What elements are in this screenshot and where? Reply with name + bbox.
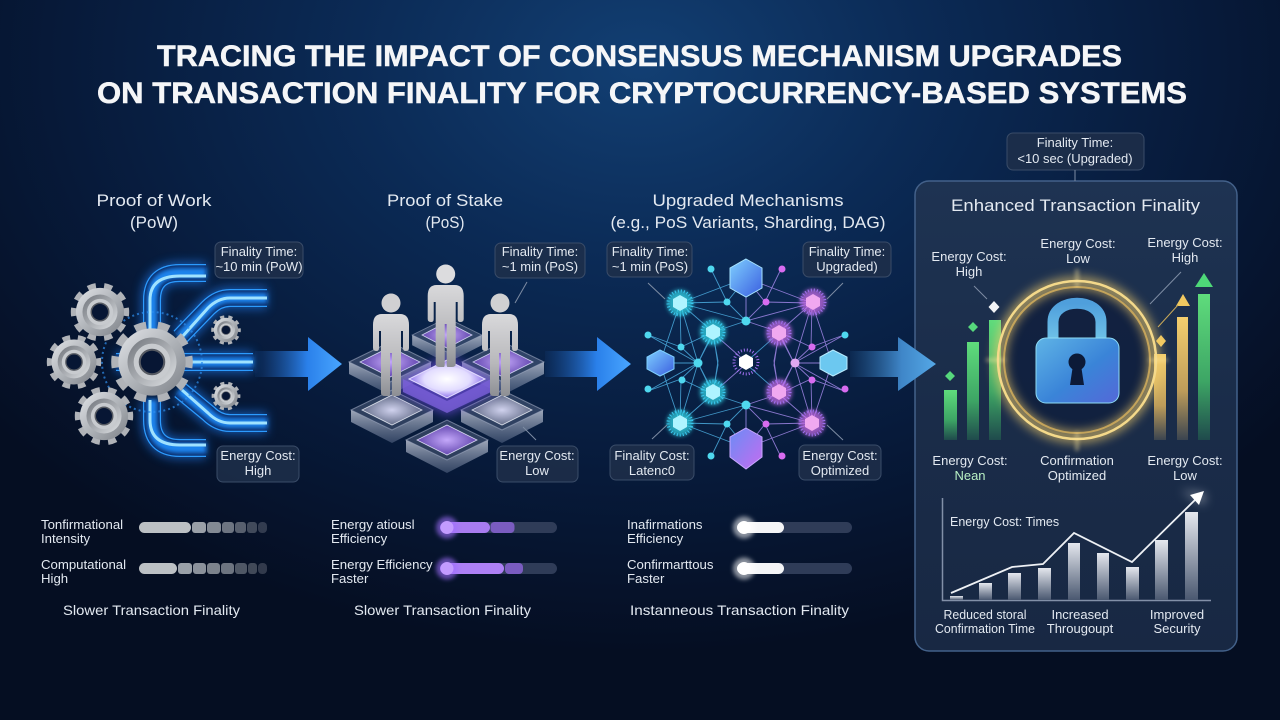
callout: finality time pos: ~1 min (PoS) <box>502 259 578 274</box>
arrow: upgraded to enhanced <box>850 337 936 391</box>
heading: upgraded mechanisms: (e.g., PoS Variants, Sharding, DAG) <box>610 213 886 232</box>
labels: energy costs upper: Energy Cost: <box>1147 235 1223 250</box>
heading: proof of stake <box>387 191 503 232</box>
heading: proof of stake: Proof of Stake <box>387 191 503 210</box>
progress: energy efficiency: Efficiency <box>331 531 388 546</box>
heading: proof of stake: (PoS) <box>426 213 464 232</box>
progress: energy efficiency faster <box>331 557 557 586</box>
labels: outcomes: Reduced storal <box>944 607 1027 622</box>
callout: finality time upgraded: Upgraded) <box>816 259 878 274</box>
callout: top finality time: Finality Time: <box>1037 135 1113 150</box>
heading: proof of work: Proof of Work <box>96 191 212 210</box>
callout: finality cost latency <box>610 445 694 480</box>
icon: glowing pipes <box>116 273 267 448</box>
labels: energy costs upper: High <box>1172 250 1198 265</box>
heading: upgraded mechanisms <box>610 191 886 232</box>
arrow: pos to upgraded <box>545 337 631 391</box>
decorative energy circle <box>102 312 202 412</box>
labels: energy costs lower: Optimized <box>1048 468 1106 483</box>
labels: energy costs lower: Confirmation <box>1040 453 1114 468</box>
callout: finality time pow <box>215 242 303 278</box>
labels: energy costs lower: Energy Cost: <box>1147 453 1223 468</box>
panel background <box>915 181 1237 651</box>
callout: finality time pos: Finality Time: <box>612 244 688 259</box>
callout: energy cost high <box>217 446 299 482</box>
heading: upgraded mechanisms: Upgraded Mechanisms <box>652 191 844 210</box>
progress: confirmations faster <box>627 557 852 586</box>
labels: energy costs lower <box>932 453 1223 483</box>
callout: finality time pos: ~1 min (PoS) <box>612 259 688 274</box>
panel: proof of work <box>41 191 303 618</box>
callout: energy cost optimized <box>799 445 881 480</box>
callout: energy cost high: Energy Cost: <box>220 448 296 463</box>
icon: lock with gold ring <box>986 269 1168 451</box>
diagram: network <box>644 259 848 469</box>
labels: energy costs lower: Energy Cost: <box>932 453 1008 468</box>
progress: confirmational intensity: Tonfirmational <box>41 517 123 532</box>
callout: energy cost optimized: Optimized <box>811 463 869 478</box>
progress: confirmations faster: Confirmarttous <box>627 557 714 572</box>
labels: outcomes: Increased <box>1051 607 1109 622</box>
heading: enhanced finality: Enhanced Transaction Finality <box>951 196 1201 215</box>
heading: proof of work <box>96 191 212 232</box>
callout: top finality time: <10 sec (Upgraded) <box>1017 151 1133 166</box>
title <box>97 40 1187 110</box>
chart: green bars <box>944 301 1001 440</box>
title: ON TRANSACTION FINALITY FOR CRYPTOCURRENCY-BASED SYSTEMS <box>97 77 1187 110</box>
callout: energy cost low: Low <box>525 463 550 478</box>
callout: finality time upgraded <box>803 242 891 277</box>
progress: confirmational intensity: Intensity <box>41 531 91 546</box>
progress: computational high <box>41 557 267 586</box>
progress: computational high: High <box>41 571 68 586</box>
progress: confirmations efficiency: Efficiency <box>627 531 684 546</box>
callout: finality time pos <box>495 243 585 278</box>
progress: confirmations efficiency: Inafirmations <box>627 517 703 532</box>
labels: energy costs lower: Nean <box>954 468 986 483</box>
labels: energy costs upper: High <box>956 264 982 279</box>
callout: energy cost optimized: Energy Cost: <box>802 448 878 463</box>
callout: top finality time <box>1007 133 1144 170</box>
progress: confirmational intensity <box>41 517 267 546</box>
labels: energy costs lower: Low <box>1173 468 1198 483</box>
labels: outcomes: Througoupt <box>1047 621 1114 636</box>
caption: slower finality: Slower Transaction Finality <box>63 602 240 618</box>
chart: energy cost times <box>942 490 1211 600</box>
progress: confirmations efficiency <box>627 516 852 546</box>
chart: gold and green bars <box>1154 273 1213 440</box>
callout: finality time pow: ~10 min (PoW) <box>215 259 303 274</box>
chart: energy cost times: Energy Cost: Times <box>950 515 1059 529</box>
caption: slower finality: Slower Transaction Finality <box>354 602 531 618</box>
labels: outcomes <box>935 607 1204 636</box>
icon: gears <box>50 286 239 442</box>
callout: finality time pow: Finality Time: <box>221 244 297 259</box>
labels: outcomes: Security <box>1154 621 1201 636</box>
callout: finality cost latency: Finality Cost: <box>614 448 690 463</box>
callout: energy cost low <box>497 446 578 482</box>
icon: validators <box>373 264 518 396</box>
progress: energy efficiency: Energy atiousl <box>331 517 415 532</box>
labels: energy costs upper: Energy Cost: <box>931 249 1007 264</box>
callout: finality time pos <box>607 242 692 277</box>
panel: proof of stake <box>331 191 585 618</box>
labels: outcomes: Improved <box>1150 607 1204 622</box>
labels: energy costs upper: Energy Cost: <box>1040 236 1116 251</box>
labels: energy costs upper <box>931 235 1223 279</box>
heading: proof of work: (PoW) <box>130 213 178 232</box>
progress: energy efficiency faster: Energy Efficiency <box>331 557 433 572</box>
progress: energy efficiency <box>331 516 557 546</box>
icon: staking platforms <box>349 318 544 473</box>
progress: computational high: Computational <box>41 557 126 572</box>
callout: energy cost low: Energy Cost: <box>499 448 575 463</box>
progress: confirmations faster: Faster <box>627 571 665 586</box>
callout: energy cost high: High <box>245 463 271 478</box>
panel: upgraded mechanisms <box>607 191 891 618</box>
labels: energy costs upper: Low <box>1066 251 1091 266</box>
labels: outcomes: Confirmation Time <box>935 621 1035 636</box>
progress: energy efficiency faster: Faster <box>331 571 369 586</box>
title: TRACING THE IMPACT OF CONSENSUS MECHANISM UPGRADES <box>157 40 1122 73</box>
arrow: pow to pos <box>255 337 342 391</box>
panel: enhanced finality <box>915 133 1237 651</box>
callout: finality time pos: Finality Time: <box>502 244 578 259</box>
caption: instantaneous finality: Instanneous Transaction Finality <box>630 602 849 618</box>
callout: finality cost latency: Latenc0 <box>629 463 675 478</box>
callout: finality time upgraded: Finality Time: <box>809 244 885 259</box>
